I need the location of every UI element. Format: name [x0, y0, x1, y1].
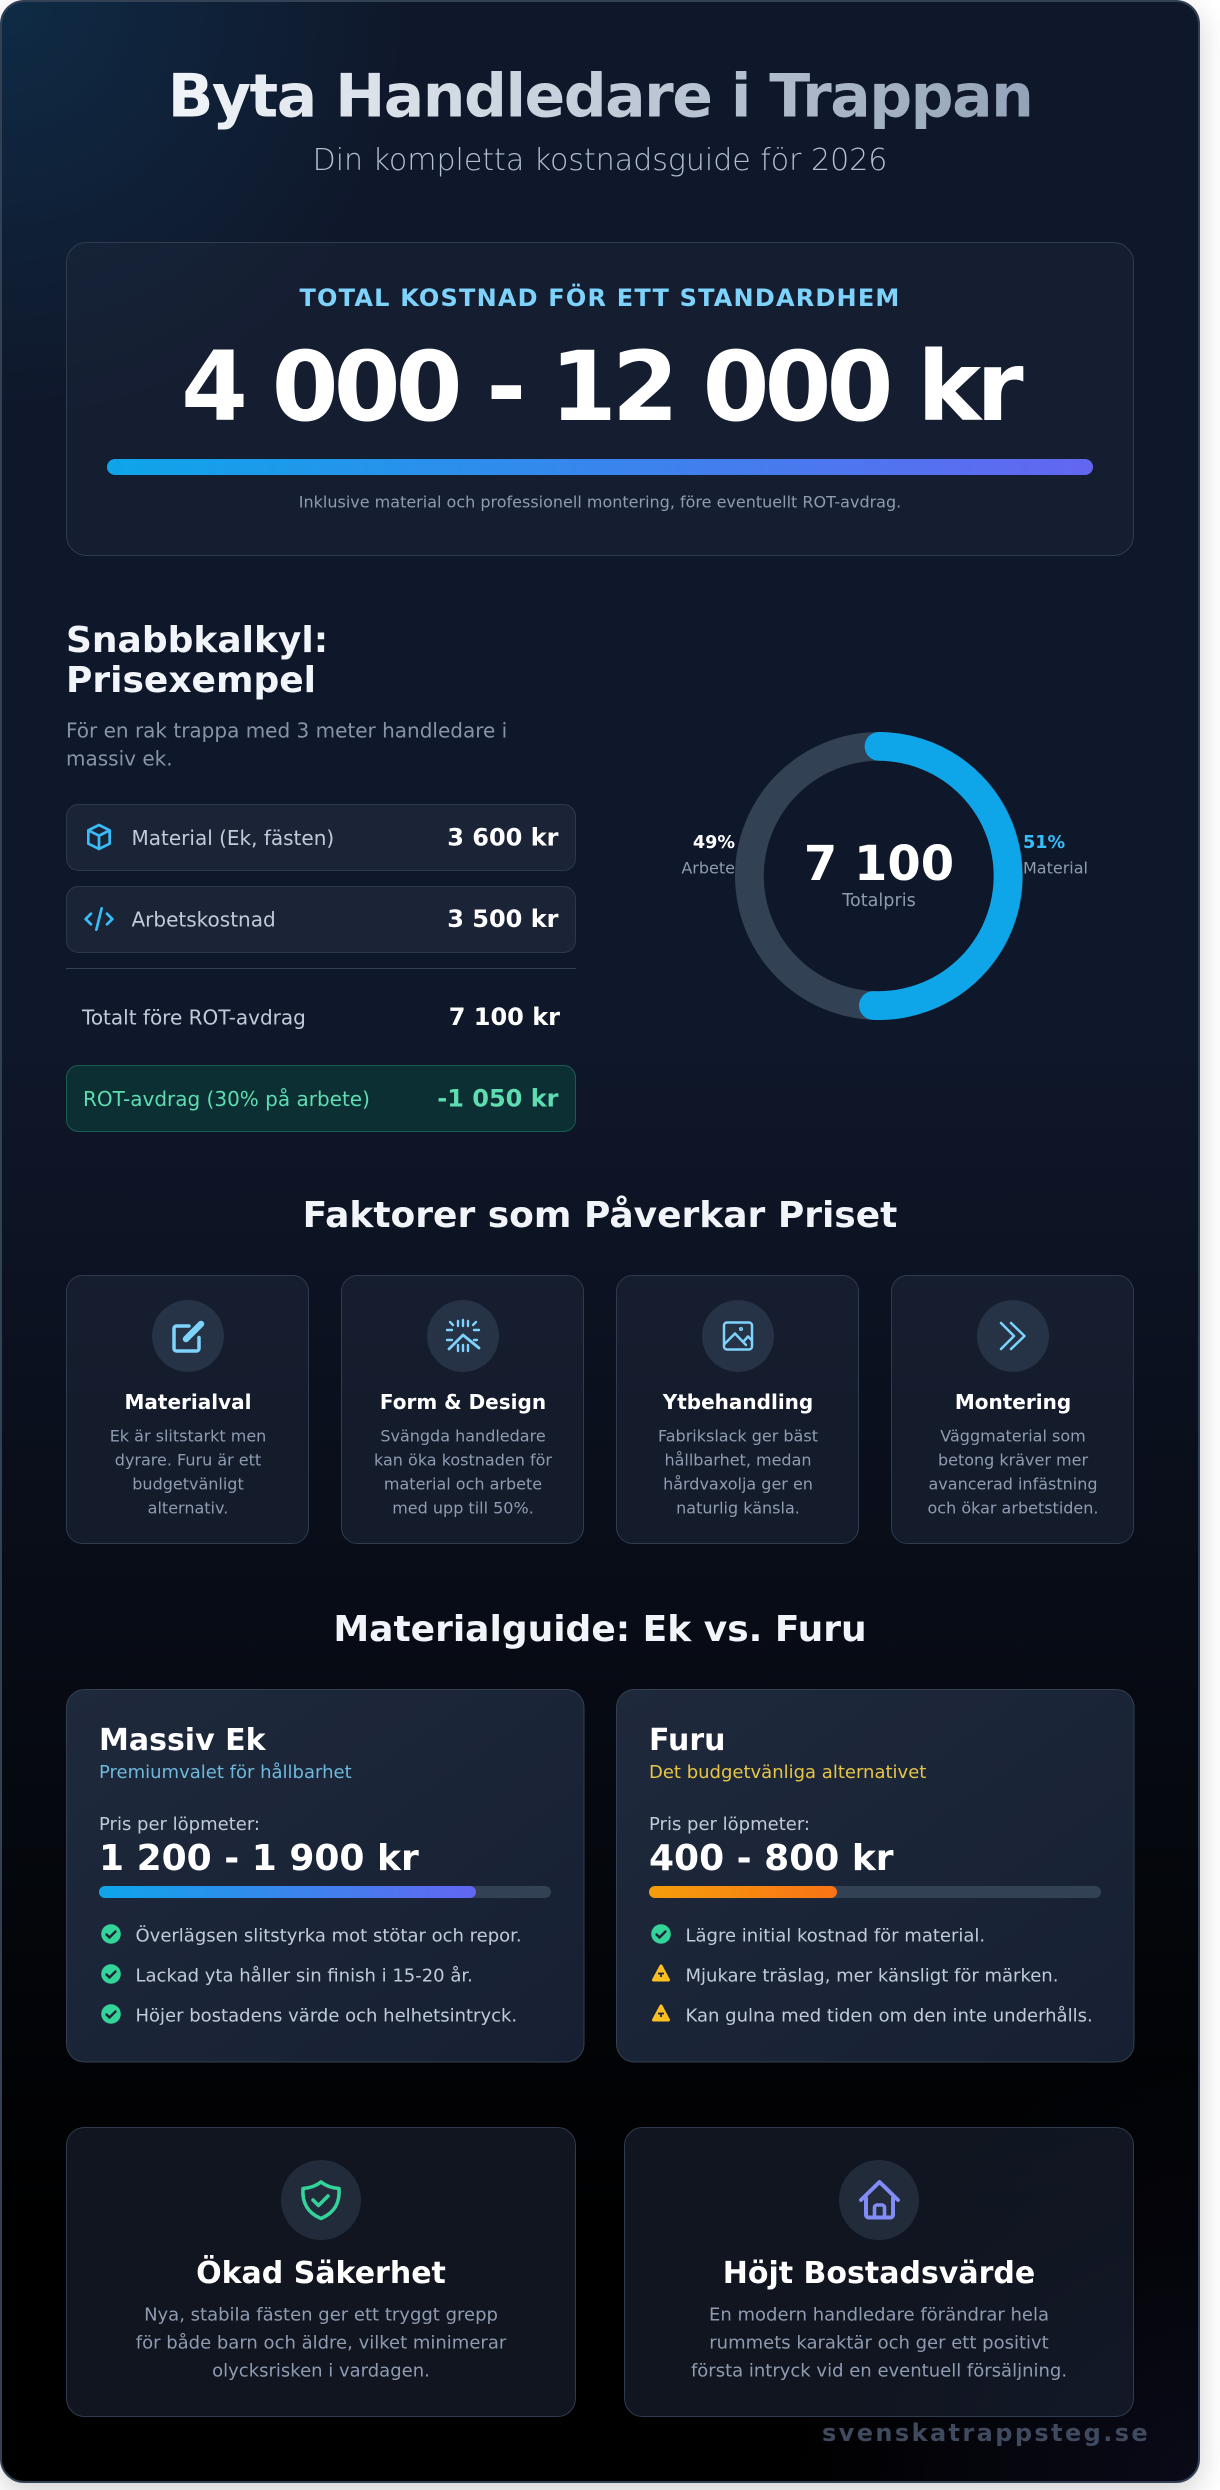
panel: Ytbehandling: hållbarhet, medan	[664, 1450, 812, 1470]
panel: Materialval: dyrare. Furu är ett	[115, 1450, 261, 1470]
icon: edit	[174, 1324, 201, 1351]
icon: shield	[303, 2182, 339, 2218]
row: ROT deduction: ROT-avdrag (30% på arbete)	[83, 1087, 370, 1111]
icon: code brackets	[86, 908, 112, 930]
row: labour: Arbetskostnad	[132, 908, 276, 932]
panel: Form & Design: kan öka kostnaden för	[374, 1450, 552, 1470]
panel: home value: rummets karaktär och ger ett positivt	[709, 2332, 1049, 2354]
panel: home value: Höjt Bostadsvärde	[723, 2256, 1035, 2291]
panel: Furu	[616, 1690, 1134, 2062]
panel: Montering	[892, 1276, 1134, 1544]
panel: Materialval	[66, 1276, 308, 1544]
panel: Ytbehandling: Ytbehandling	[662, 1390, 813, 1414]
subtitle: Din kompletta kostnadsguide för 2026	[313, 143, 887, 178]
row: ROT deduction: -1 050 kr	[437, 1084, 559, 1112]
price bar	[649, 1886, 1101, 1898]
list: pros and cons	[651, 1924, 1093, 2026]
total cost note: Inklusive material och professionell montering, före eventuellt ROT-avdrag.	[299, 492, 901, 512]
list: pros: Höjer bostadens värde och helhetsintryck.	[136, 2006, 517, 2026]
panel: safety: olycksrisken i vardagen.	[212, 2360, 430, 2382]
panel: Furu: Furu	[649, 1723, 726, 1758]
total cost label: TOTAL KOSTNAD FÖR ETT STANDARDHEM	[299, 282, 901, 312]
row: material: Material (Ek, fästen)	[132, 826, 334, 850]
list: pros and cons: Lägre initial kostnad för material.	[686, 1926, 985, 1946]
list: pros and cons: Mjukare träslag, mer känsligt för märken.	[686, 1966, 1058, 1986]
icon: image	[724, 1322, 752, 1350]
panel: Montering: avancerad infästning	[928, 1474, 1098, 1494]
title: Byta Handledare i Trappan	[168, 62, 1032, 132]
panel: Materialval: budgetvänligt	[132, 1474, 244, 1494]
row: total before ROT	[81, 1003, 560, 1031]
panel: Furu: Pris per löpmeter:	[649, 1814, 810, 1835]
panel: Furu: 400 - 800 kr	[649, 1838, 894, 1879]
panel: Massiv Ek: Massiv Ek	[99, 1723, 267, 1758]
panel: safety	[66, 2128, 576, 2416]
panel: safety: för både barn och äldre, vilket minimerar	[136, 2332, 507, 2354]
total cost value: 4 000 - 12 000 kr	[181, 331, 1024, 443]
donut chart: 49%	[693, 833, 735, 853]
heading: material guide: Materialguide: Ek vs. Furu	[333, 1609, 867, 1650]
panel: Ytbehandling: hårdvaxolja ger en	[663, 1474, 813, 1494]
row: total before ROT: Totalt före ROT-avdrag	[81, 1006, 306, 1030]
panel: Montering: och ökar arbetstiden.	[928, 1498, 1098, 1518]
donut chart: Arbete	[681, 858, 735, 878]
list: pros	[101, 1924, 522, 2026]
panel: Form & Design	[342, 1276, 584, 1544]
panel: Form & Design: Svängda handledare	[380, 1426, 546, 1446]
icon: double chevron	[1001, 1323, 1024, 1349]
panel: Montering: Montering	[955, 1390, 1071, 1414]
icon: cube	[88, 825, 110, 849]
icon: sun and roof	[447, 1320, 479, 1351]
price bar	[99, 1886, 551, 1898]
panel: Form & Design: Form & Design	[380, 1390, 546, 1414]
row: material	[66, 804, 576, 870]
intro text: massiv ek.	[66, 746, 173, 770]
donut chart: Totalpris	[841, 891, 916, 911]
section heading: Snabbkalkyl: Snabbkalkyl:	[66, 620, 328, 661]
panel: Massiv Ek: Pris per löpmeter:	[99, 1814, 260, 1835]
panel: quick calculation	[66, 620, 576, 1132]
panel: safety: Ökad Säkerhet	[196, 2254, 446, 2291]
row: labour: 3 500 kr	[447, 905, 559, 933]
heading: factors: Faktorer som Påverkar Priset	[303, 1195, 897, 1236]
panel: Materialval: alternativ.	[148, 1498, 228, 1518]
row: material: 3 600 kr	[447, 824, 559, 852]
donut chart: Material	[1023, 858, 1088, 878]
panel: Massiv Ek: Premiumvalet för hållbarhet	[99, 1762, 352, 1783]
list: pros: Lackad yta håller sin finish i 15-20 år.	[136, 1966, 473, 1986]
panel: Montering: betong kräver mer	[938, 1450, 1088, 1470]
row: labour	[66, 886, 576, 952]
donut chart: 51%	[1023, 833, 1065, 853]
list: pros: Överlägsen slitstyrka mot stötar och repor.	[136, 1924, 522, 1946]
panel: Materialval: Materialval	[125, 1390, 251, 1414]
donut chart: 7 100	[804, 836, 954, 892]
panel: Materialval: Ek är slitstarkt men	[110, 1426, 266, 1446]
list: pros and cons: Kan gulna med tiden om den inte underhålls.	[686, 2006, 1093, 2026]
panel: home value: första intryck vid en eventuell försäljning.	[691, 2360, 1067, 2382]
panel: Ytbehandling	[616, 1276, 858, 1544]
panel: Ytbehandling: Fabrikslack ger bäst	[658, 1426, 818, 1446]
panel: Ytbehandling: naturlig känsla.	[676, 1498, 800, 1518]
panel: safety: Nya, stabila fästen ger ett tryggt grepp	[144, 2304, 498, 2326]
intro text: För en rak trappa med 3 meter handledare i	[66, 718, 507, 742]
panel: Furu: Det budgetvänliga alternativet	[649, 1762, 926, 1783]
icon: house	[861, 2182, 898, 2218]
row: ROT deduction	[66, 1066, 576, 1132]
panel: Massiv Ek	[66, 1690, 584, 2062]
panel: Montering: Väggmaterial som	[940, 1426, 1086, 1446]
panel: Massiv Ek: 1 200 - 1 900 kr	[99, 1838, 419, 1879]
panel: home value: En modern handledare förändrar hela	[709, 2304, 1049, 2326]
panel: total cost	[66, 242, 1134, 556]
donut chart	[681, 746, 1088, 1006]
section heading: Snabbkalkyl: Prisexempel	[66, 660, 316, 701]
panel: Form & Design: med upp till 50%.	[392, 1498, 534, 1518]
watermark: svenskatrappsteg.se	[822, 2419, 1150, 2447]
total cost gradient bar	[107, 459, 1093, 475]
row: total before ROT: 7 100 kr	[449, 1003, 560, 1031]
panel: Form & Design: material och arbete	[384, 1474, 542, 1494]
panel: home value	[624, 2128, 1134, 2416]
